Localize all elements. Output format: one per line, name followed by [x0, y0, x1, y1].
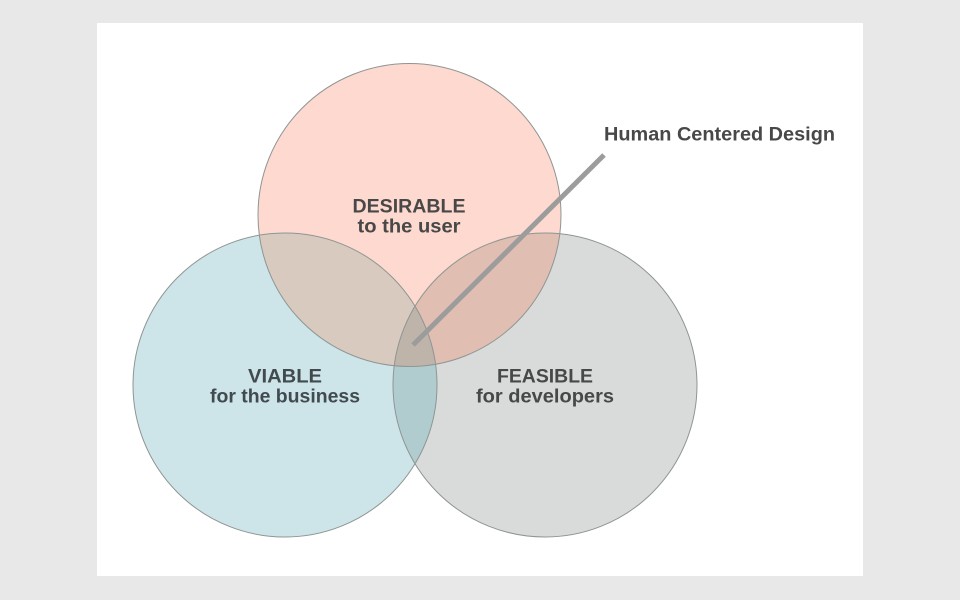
label: feasible: for developers	[476, 386, 614, 408]
label: viable	[210, 366, 360, 408]
circle: feasible	[393, 233, 697, 537]
overlap: viable and feasible	[393, 306, 437, 464]
label: viable: for the business	[210, 386, 360, 408]
label: viable: VIABLE	[248, 366, 322, 388]
overlap: desirable and viable	[260, 234, 414, 365]
white panel	[97, 23, 863, 576]
label: feasible: FEASIBLE	[497, 366, 593, 388]
venn diagram	[133, 64, 697, 537]
label: desirable: DESIRABLE	[352, 196, 466, 218]
label: feasible	[476, 366, 614, 408]
label: desirable: to the user	[358, 216, 461, 238]
pointer line	[413, 155, 604, 345]
overlap: center, human centered design	[394, 308, 435, 366]
overlap: desirable and feasible	[416, 234, 560, 364]
infographic	[97, 23, 863, 576]
callout: human centered design: Human Centered Design	[604, 124, 835, 146]
circle: desirable	[258, 64, 561, 366]
circle outlines	[133, 64, 697, 537]
circle: viable	[133, 233, 437, 537]
label: desirable	[352, 196, 466, 238]
